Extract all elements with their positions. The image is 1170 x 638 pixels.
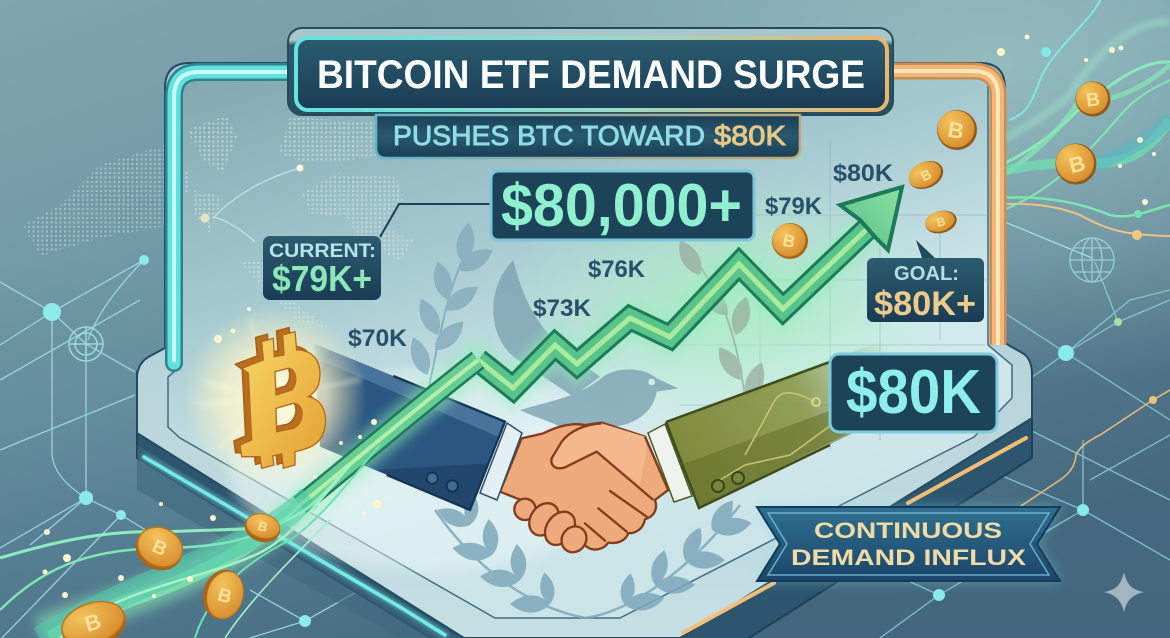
left cuff — [480, 423, 522, 500]
coin: left 2 — [241, 510, 283, 546]
network lines right — [830, 238, 1170, 638]
goal callout — [867, 240, 984, 323]
coin: far right top: B — [1085, 89, 1101, 112]
right cuff — [648, 424, 692, 502]
coin: top right 3 — [923, 207, 959, 237]
icon: sparkle star — [1104, 572, 1144, 612]
price labels along the chart: $79K — [765, 193, 823, 220]
network nodes left — [43, 255, 311, 627]
frame: shell soft shadow — [137, 445, 460, 638]
world map dots — [182, 115, 413, 330]
coin: far right top — [1076, 82, 1110, 116]
coin: left 3 — [197, 565, 249, 624]
background world map — [23, 145, 165, 256]
title plate — [288, 28, 893, 115]
mint glow behind chart — [505, 175, 965, 435]
icon: glowing bitcoin symbol — [183, 306, 367, 490]
connector: current price — [380, 204, 491, 237]
subtitle text: PUSHES BTC TOWARD — [393, 120, 705, 151]
frame: neon orange right edge — [880, 71, 998, 345]
current price callout — [263, 236, 381, 300]
icon: left globe node — [69, 327, 103, 361]
current label: CURRENT: — [269, 241, 376, 262]
price labels along the chart — [348, 160, 894, 352]
banner text line 2: DEMAND INFLUX — [791, 545, 1026, 570]
data streams top right — [895, 0, 1170, 258]
dove silhouette — [493, 260, 678, 427]
subtitle highlight: $80K — [714, 120, 786, 151]
goal label: GOAL: — [894, 263, 959, 285]
data streams bottom left — [0, 445, 380, 638]
subtitle plate — [376, 115, 800, 158]
goal value: $80K+ — [874, 285, 976, 323]
laurel branch: upper left — [405, 221, 497, 395]
coin: bottom-left large — [55, 594, 132, 638]
coin: left 2: B — [256, 518, 269, 535]
frame: chrome rim — [137, 63, 1032, 638]
$80K box — [830, 354, 997, 432]
coin: top right 1: B — [946, 117, 966, 144]
target price text: $80,000+ — [501, 172, 742, 239]
frame: glow strips — [144, 438, 1026, 635]
coin: left 1 — [129, 520, 190, 578]
coin: top right 3: B — [935, 214, 947, 230]
coin: left 3: B — [215, 585, 234, 608]
laurel branch: upper right — [673, 236, 770, 403]
arrow head — [840, 187, 902, 250]
left sleeve — [313, 343, 505, 510]
hands — [500, 423, 668, 557]
coin: near $79K — [772, 223, 808, 259]
network lines left — [0, 260, 360, 638]
laurel wreath: bottom — [434, 493, 753, 618]
right sleeve — [666, 335, 905, 508]
price labels along the chart: $70K — [348, 325, 408, 352]
frame: outer shell side — [137, 372, 1032, 638]
coin: left 1: B — [149, 536, 170, 561]
map route arc — [200, 164, 304, 242]
price labels along the chart: $80K — [833, 160, 894, 187]
coin: top right 2: B — [918, 166, 934, 184]
chart grid — [660, 140, 988, 480]
title text: BITCOIN ETF DEMAND SURGE — [317, 53, 865, 97]
target price box — [491, 171, 754, 240]
green growth arrow — [40, 187, 902, 632]
$80K text: $80K — [846, 358, 981, 427]
frame: neon teal left edge — [174, 72, 300, 363]
current value: $79K+ — [272, 258, 372, 299]
sparkles right — [997, 34, 1156, 205]
price labels along the chart: $76K — [588, 256, 646, 283]
coins — [55, 82, 1110, 638]
coin: far right lower: B — [1066, 150, 1088, 178]
coin: top right 2 — [904, 156, 948, 194]
banner text line 1: CONTINUOUS — [814, 518, 1002, 543]
frame: inner panel — [168, 78, 1012, 618]
coin: far right lower — [1056, 144, 1096, 184]
banner: continuous demand influx — [757, 507, 1060, 581]
network nodes right — [933, 318, 1157, 601]
coin: top right 1 — [937, 110, 977, 150]
price labels along the chart: $73K — [533, 295, 592, 322]
handshake — [313, 335, 905, 557]
light glow panel center — [230, 370, 630, 570]
coin: bottom-left large: B — [81, 608, 104, 637]
coin: near $79K: B — [781, 231, 797, 252]
orange trend line right — [1000, 390, 1170, 520]
icon: right globe — [1070, 238, 1114, 282]
sparkles left — [42, 307, 381, 598]
